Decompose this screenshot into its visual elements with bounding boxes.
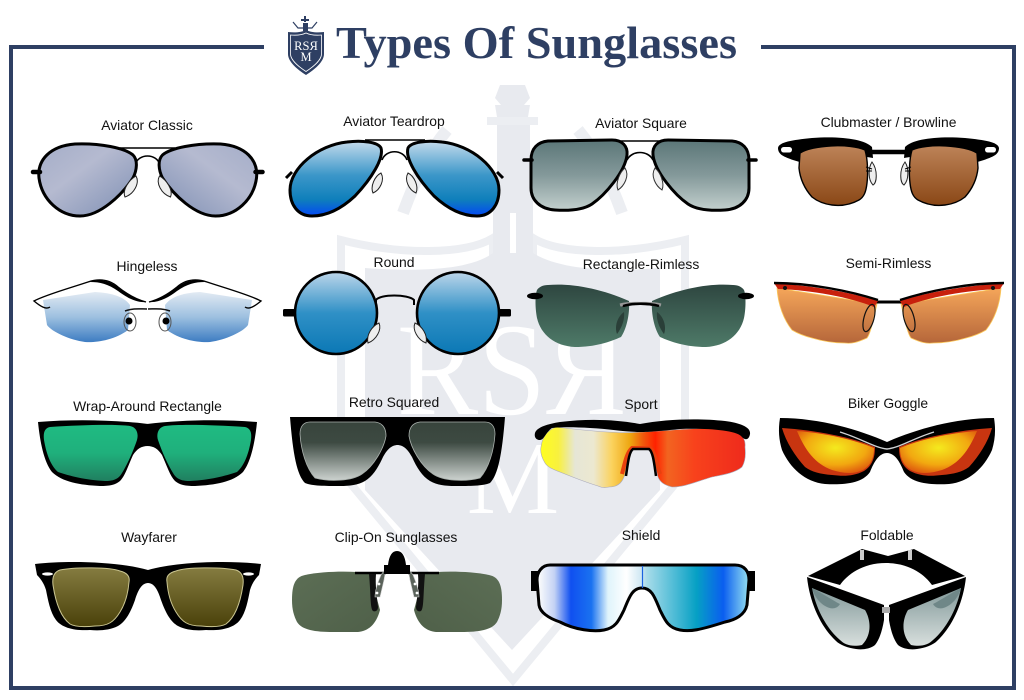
item: Wrap-Around Rectangle: Wrap-Around Rectangle (73, 398, 222, 414)
sunglasses: Aviator Teardrop (286, 140, 503, 216)
sunglasses: Semi-Rimless (774, 283, 1004, 343)
logo crest: M (300, 50, 312, 64)
logo crest: RSЯ (294, 39, 318, 53)
item: Sport (535, 396, 750, 488)
item: Semi-Rimless (774, 255, 1004, 343)
sunglasses: Sport (535, 419, 750, 488)
item: Semi-Rimless: Semi-Rimless (846, 255, 931, 271)
sunglasses: Clubmaster (778, 137, 999, 205)
item: Rectangle-Rimless (527, 256, 754, 347)
item: Wayfarer: Wayfarer (121, 529, 177, 545)
item: Foldable: Foldable (860, 527, 914, 543)
item: Shield: Shield (622, 527, 660, 543)
sunglasses: Rectangle-Rimless (527, 285, 754, 347)
item: Hingeless: Hingeless (116, 258, 178, 274)
sunglasses: Aviator Square (524, 140, 756, 210)
item: Wayfarer (35, 529, 261, 630)
sunglasses: Wrap-Around Rectangle (38, 420, 257, 486)
sunglasses: Shield (531, 565, 755, 631)
item: Round: Round (374, 254, 414, 270)
sunglasses: Wayfarer (35, 562, 261, 630)
logo crest (288, 16, 324, 75)
background watermark: RSM crest: M (467, 421, 559, 536)
item: Rectangle-Rimless: Rectangle-Rimless (583, 256, 699, 272)
item: Wrap-Around Rectangle (38, 398, 257, 486)
title: Types Of Sunglasses (336, 18, 737, 68)
sunglasses: Aviator Classic (33, 144, 262, 216)
sunglasses: Hingeless (34, 280, 261, 342)
sunglasses: Round (283, 272, 511, 354)
item: Biker Goggle: Biker Goggle (848, 395, 928, 411)
item: Clip-On Sunglasses: Clip-On Sunglasses (335, 529, 457, 545)
item: Round (283, 254, 511, 354)
background watermark: RSM crest: RSЯ (397, 296, 627, 443)
sunglasses: Foldable (807, 549, 966, 649)
item: Retro Squared (290, 394, 505, 486)
item: Clip-On Sunglasses (292, 529, 502, 632)
sunglasses: Clip-On (292, 551, 502, 632)
label: Aviator Classic (101, 117, 193, 133)
item: Clubmaster / Browline (778, 114, 999, 205)
item: Clubmaster / Browline: Clubmaster / Browline (821, 114, 957, 130)
item: Foldable (807, 527, 966, 649)
sunglasses: Retro Squared (290, 417, 505, 486)
item: Biker Goggle (779, 395, 995, 484)
sunglasses: Biker Goggle (779, 418, 995, 484)
item: Aviator Square: Aviator Square (595, 115, 687, 131)
item: Aviator Teardrop: Aviator Teardrop (343, 113, 445, 129)
item: Aviator Square (524, 115, 756, 210)
background watermark: RSM crest (341, 85, 685, 680)
item: Shield (531, 527, 755, 631)
item: Retro Squared: Retro Squared (349, 394, 439, 410)
item: Sport: Sport (624, 396, 658, 412)
item: Aviator Teardrop (286, 113, 503, 216)
item: Hingeless (34, 258, 261, 342)
item: Aviator Classic (33, 117, 262, 216)
